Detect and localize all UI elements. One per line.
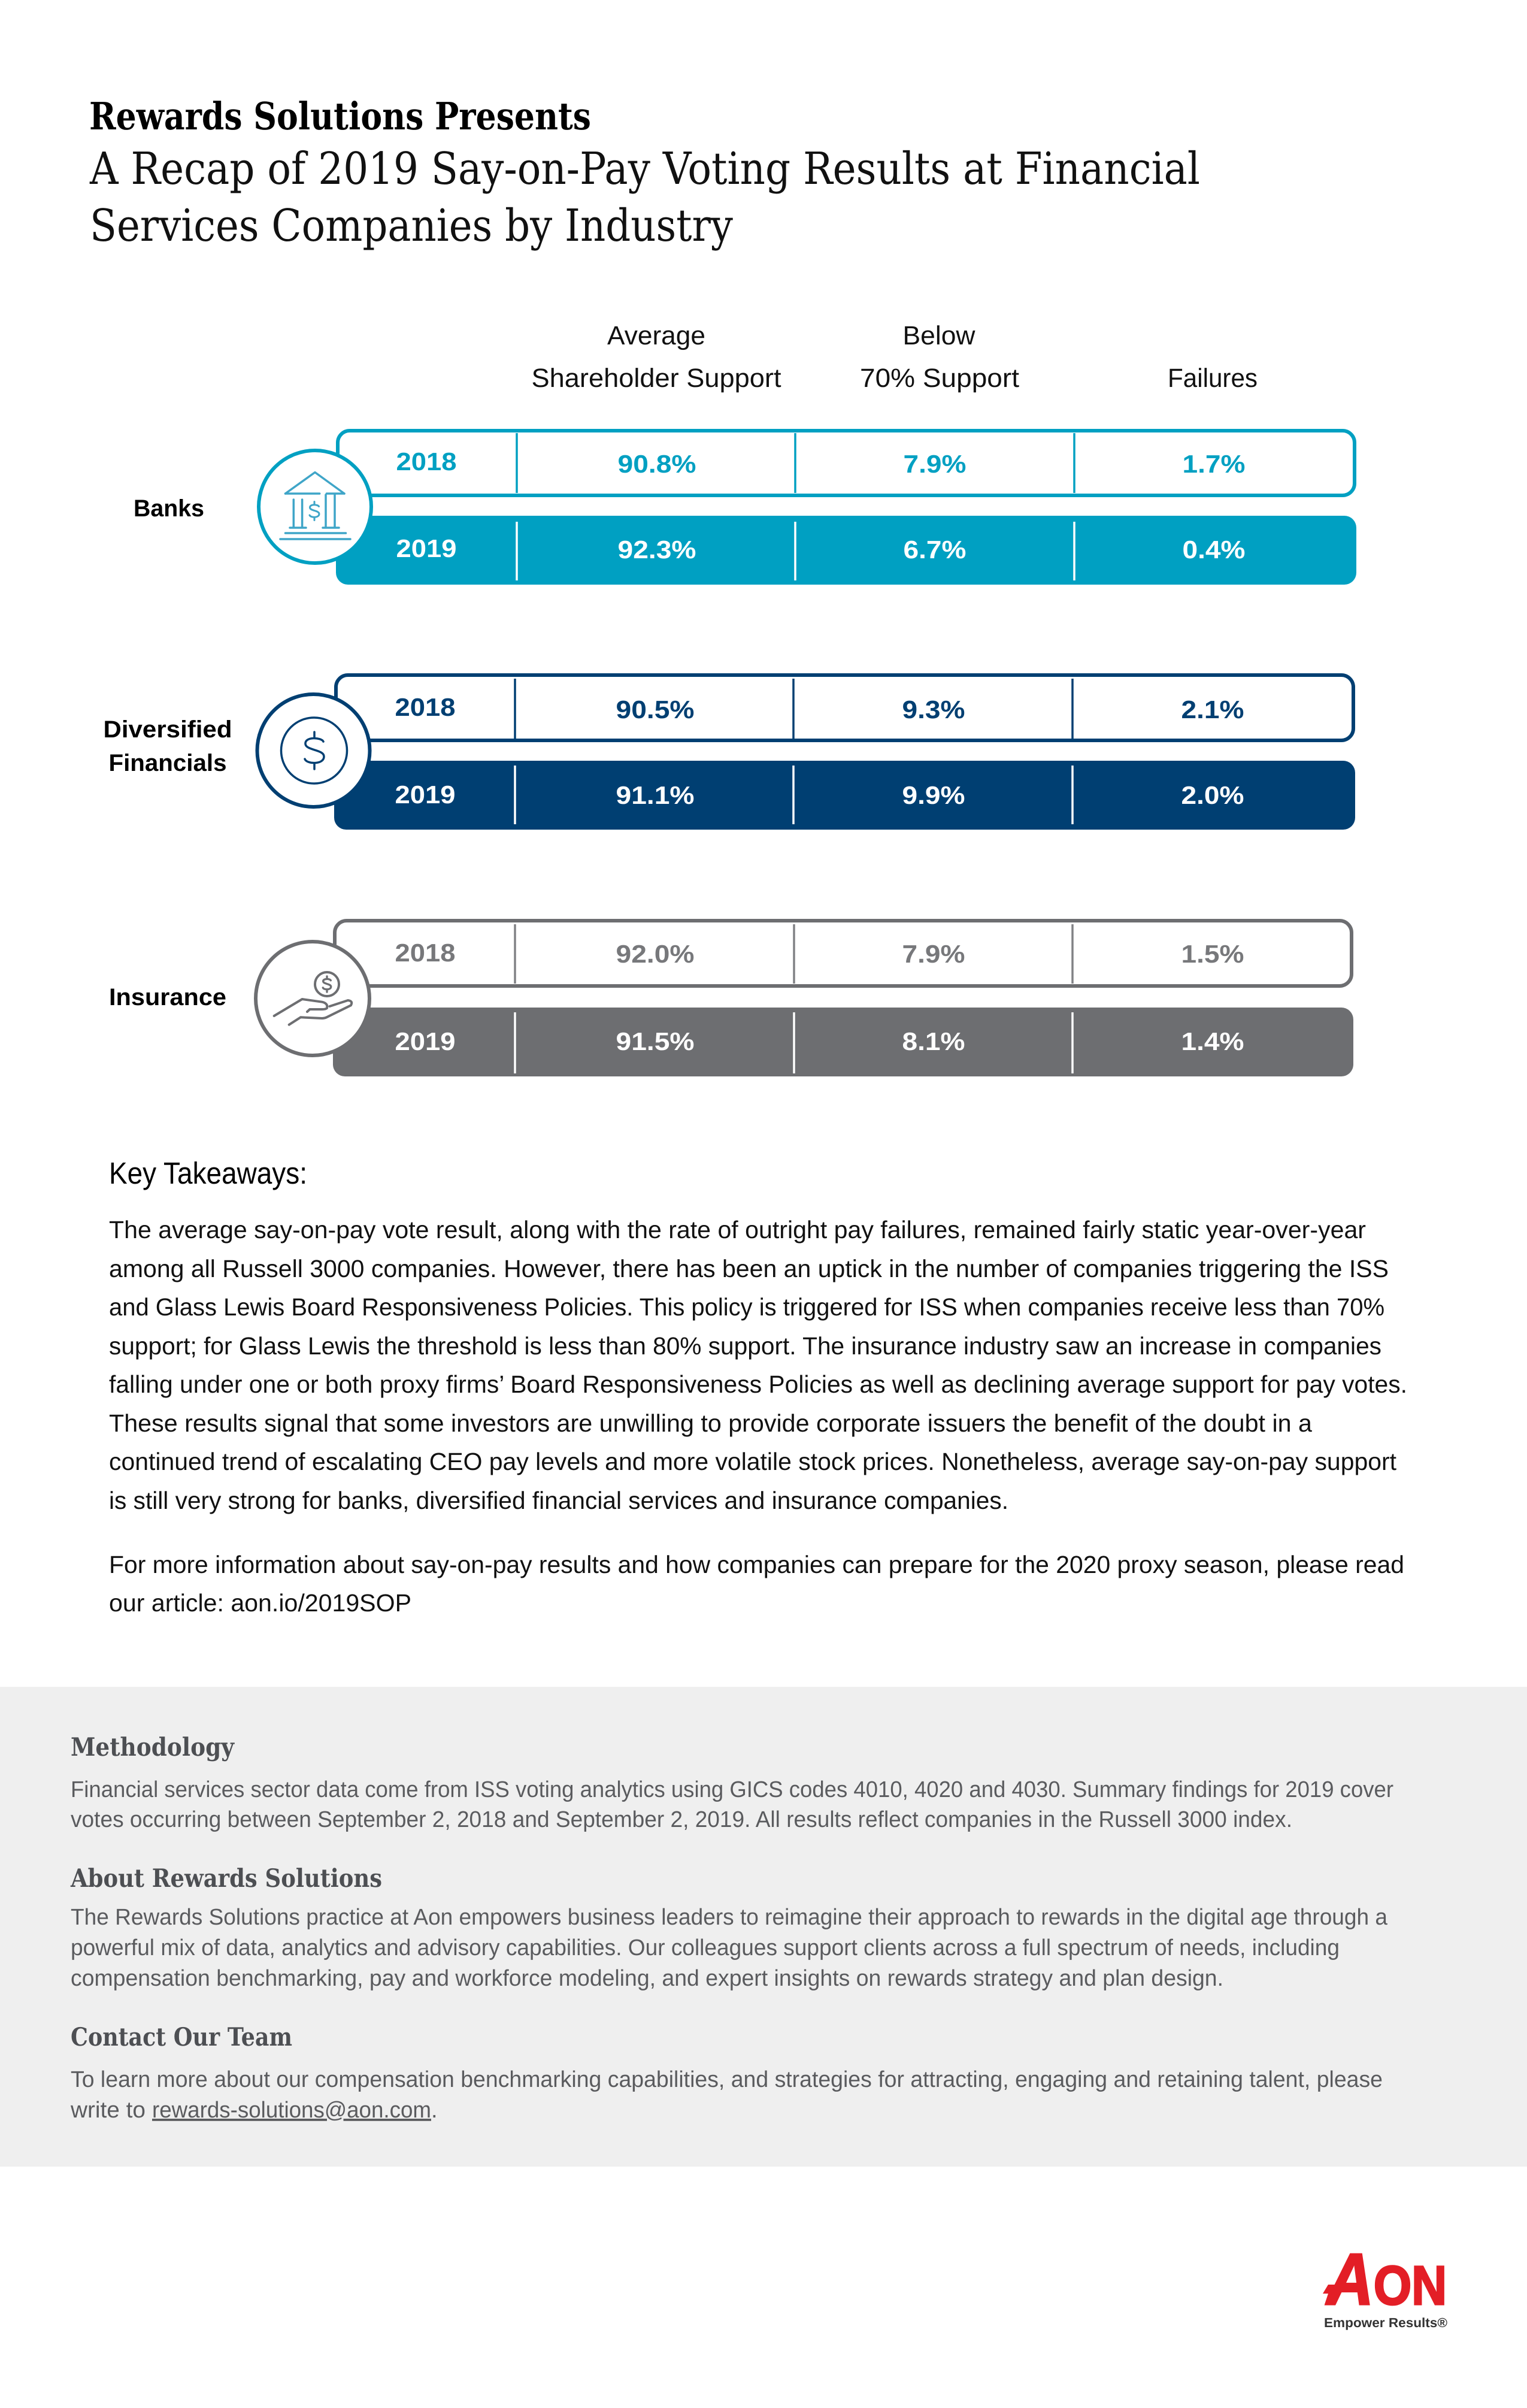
text block: further reading xyxy=(109,1551,1404,1617)
header: average shareholder support xyxy=(532,321,781,393)
text block: takeaways paragraph: among all Russell 3000 companies. However, there has been an uptick in the number of companies triggering the ISS xyxy=(109,1255,1389,1282)
text block: about: compensation benchmarking, pay and workforce modeling, and expert insights on rewards strategy and plan design. xyxy=(71,1966,1223,1991)
insurance 2019 row: 1.4% xyxy=(1181,1027,1244,1055)
insurance 2019 row: 2019 xyxy=(395,1027,455,1055)
diversified 2019 row xyxy=(334,761,1355,830)
text block: further reading: our article: aon.io/2019SOP xyxy=(109,1589,411,1617)
text block: methodology: votes occurring between September 2, 2018 and September 2, 2019. All results reflect companies in the Russell 3000 index. xyxy=(71,1807,1292,1832)
text block: methodology xyxy=(71,1777,1393,1832)
column headers xyxy=(532,321,1258,393)
header: average shareholder support: Average xyxy=(607,321,705,350)
header: below 70% support xyxy=(860,321,1019,393)
diversified 2018 row: 9.3% xyxy=(902,695,965,724)
text block: takeaways paragraph: These results signal that some investors are unwilling to provide corporate issuers the benefit of the doubt in a xyxy=(109,1409,1312,1437)
heading: methodology: Methodology xyxy=(71,1732,235,1762)
heading: key takeaways: Key Takeaways: xyxy=(109,1156,307,1190)
text block: takeaways paragraph xyxy=(109,1216,1407,1514)
text block: contact: rewards-solutions@aon.com xyxy=(152,2098,431,2123)
text block: methodology: Financial services sector data come from ISS voting analytics using GICS codes 4010, 4020 and 4030. Summary findings for 2019 cover xyxy=(71,1777,1393,1802)
text block: takeaways paragraph: falling under one or both proxy firms’ Board Responsiveness Policies as well as declining average support for pay votes. xyxy=(109,1371,1407,1398)
banks 2018 row: 7.9% xyxy=(903,450,967,478)
icon: hand holding coin xyxy=(256,942,369,1055)
header: below 70% support: 70% Support xyxy=(860,364,1019,393)
text block: takeaways paragraph: and Glass Lewis Board Responsiveness Policies. This policy is triggered for ISS when companies receive less than 70% xyxy=(109,1293,1384,1321)
panel: footer information xyxy=(0,1687,1527,2167)
diversified 2018 row xyxy=(336,675,1353,740)
label: banks: Banks xyxy=(134,495,204,522)
text block: contact xyxy=(70,2067,1383,2123)
label: diversified financials: Diversified xyxy=(103,716,232,743)
text block: further reading: For more information about say-on-pay results and how companies can prepare for the 2020 proxy season, please read xyxy=(109,1551,1404,1578)
text block: contact: . xyxy=(431,2098,438,2123)
title: eyebrow: Rewards Solutions Presents xyxy=(89,94,591,138)
panel: insurance xyxy=(109,921,1353,1076)
title: main line two: Services Companies by Industry xyxy=(90,200,733,252)
logo: Aon Empower Results: AON xyxy=(1325,2238,1447,2320)
diversified 2018 row: 90.5% xyxy=(616,695,695,724)
banks 2018 row: 1.7% xyxy=(1182,450,1246,478)
diversified 2019 row: 2.0% xyxy=(1181,781,1244,809)
panel: diversified financials xyxy=(103,675,1355,830)
diversified 2019 row: 9.9% xyxy=(902,781,965,809)
text block: contact: write to xyxy=(70,2098,146,2123)
icon: bank building xyxy=(259,450,371,563)
text block: takeaways paragraph: continued trend of escalating CEO pay levels and more volatile stock prices. Nonetheless, average say-on-pay support xyxy=(109,1448,1397,1475)
insurance 2018 row: 1.5% xyxy=(1181,940,1244,968)
heading: about rewards solutions: About Rewards Solutions xyxy=(70,1864,382,1893)
label: diversified financials xyxy=(103,716,232,776)
panel: banks xyxy=(134,431,1356,585)
text block: takeaways paragraph: The average say-on-pay vote result, along with the rate of outright pay failures, remained fairly static year-over-year xyxy=(109,1216,1366,1244)
banks 2019 row: 2019 xyxy=(396,534,456,562)
insurance 2019 row xyxy=(333,1008,1353,1076)
header: failures: Failures xyxy=(1168,364,1258,393)
text block: takeaways paragraph: support; for Glass Lewis the threshold is less than 80% support. The insurance industry saw an increase in companies xyxy=(109,1332,1381,1360)
diversified 2019 row: 91.1% xyxy=(616,781,695,809)
icon: dollar coin xyxy=(257,694,370,807)
label: insurance: Insurance xyxy=(109,984,226,1011)
banks 2018 row xyxy=(338,431,1355,495)
insurance 2018 row: 7.9% xyxy=(902,940,965,968)
text block: takeaways paragraph: is still very strong for banks, diversified financial services and insurance companies. xyxy=(109,1487,1008,1514)
text block: contact: To learn more about our compensation benchmarking capabilities, and strategies for attracting, engaging and retaining talent, please xyxy=(71,2067,1383,2092)
insurance 2019 row: 91.5% xyxy=(616,1027,695,1055)
heading: contact our team: Contact Our Team xyxy=(71,2022,292,2052)
header: below 70% support: Below xyxy=(903,321,975,350)
text block: about: powerful mix of data, analytics and advisory capabilities. Our colleagues support clients across a full spectrum of needs, including xyxy=(71,1935,1340,1961)
title: main line one: A Recap of 2019 Say-on-Pay Voting Results at Financial xyxy=(89,143,1200,195)
insurance 2018 row: 2018 xyxy=(395,939,455,967)
title block xyxy=(89,94,1200,252)
banks 2019 row: 0.4% xyxy=(1182,536,1246,564)
banks 2018 row: 90.8% xyxy=(618,450,696,478)
banks 2019 row: 6.7% xyxy=(903,536,967,564)
banks 2018 row: 2018 xyxy=(396,447,456,476)
label: diversified financials: Financials xyxy=(109,750,226,776)
diversified 2018 row: 2.1% xyxy=(1181,695,1244,724)
diversified 2019 row: 2019 xyxy=(395,781,455,809)
logo: Aon Empower Results: Empower Results® xyxy=(1324,2315,1447,2330)
key takeaways section xyxy=(109,1156,1407,1617)
text block: about xyxy=(71,1905,1388,1991)
text block: about: The Rewards Solutions practice at Aon empowers business leaders to reimagine their approach to rewards in the digital age through a xyxy=(71,1905,1388,1930)
insurance 2019 row: 8.1% xyxy=(902,1027,965,1055)
insurance 2018 row: 92.0% xyxy=(616,940,695,968)
header: average shareholder support: Shareholder Support xyxy=(532,364,781,393)
diversified 2018 row: 2018 xyxy=(395,693,455,721)
insurance 2018 row xyxy=(335,921,1352,986)
banks 2019 row: 92.3% xyxy=(618,536,696,564)
banks 2019 row xyxy=(336,516,1356,585)
